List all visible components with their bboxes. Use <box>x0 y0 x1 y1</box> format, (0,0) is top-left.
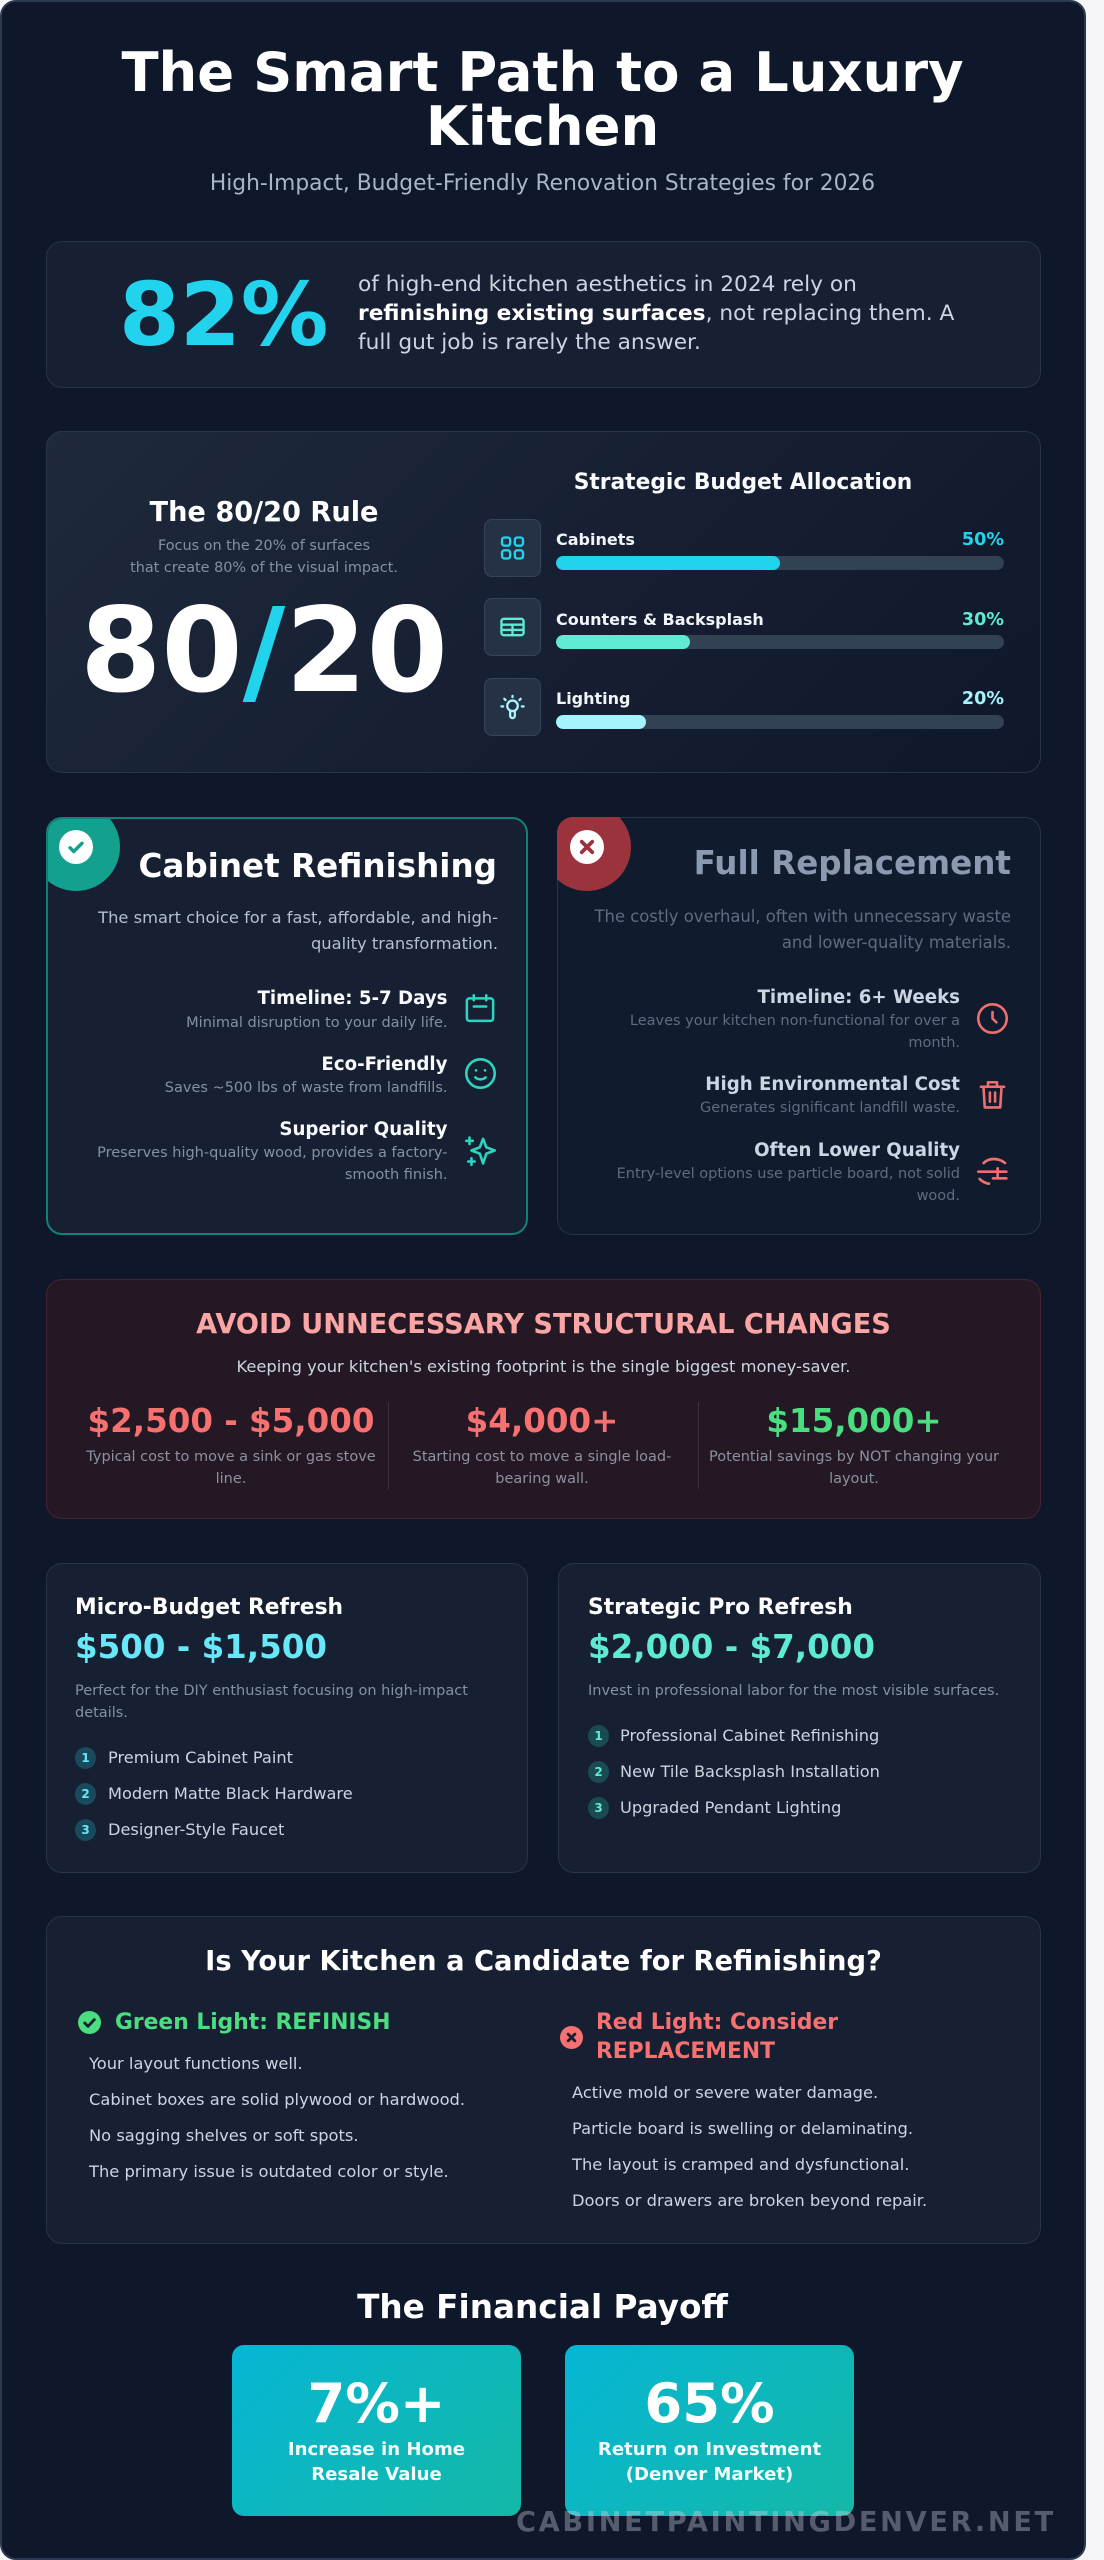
badge: cross <box>543 803 631 891</box>
label: counters: Counters & Backsplash <box>556 610 764 629</box>
stat: sink move: line. <box>216 1471 246 1487</box>
heading: AVOID UNNECESSARY STRUCTURAL CHANGES <box>196 1309 891 1340</box>
heading: Cabinet Refinishing <box>138 847 497 885</box>
feature: timeline: Timeline: 6+ Weeks <box>757 987 960 1008</box>
icon: counters <box>484 598 541 656</box>
description <box>594 907 1011 952</box>
title <box>121 41 964 158</box>
description: quality transformation. <box>311 934 498 953</box>
feature: quality: Preserves high-quality wood, provides a factory- <box>97 1144 448 1160</box>
feature: timeline: month. <box>908 1035 960 1051</box>
description: Perfect for the DIY enthusiast focusing on high-impact <box>75 1682 468 1698</box>
description: and lower-quality materials. <box>782 933 1011 952</box>
bar: lighting <box>556 715 1004 729</box>
stat: sink move: Typical cost to move a sink or gas stove <box>86 1449 376 1465</box>
value: 30%: 30% <box>962 610 1004 630</box>
feature: environmental cost <box>700 1074 960 1116</box>
label: cabinets: Cabinets <box>556 530 635 549</box>
icon: smile <box>465 1058 496 1089</box>
stat description: of high-end kitchen aesthetics in 2024 rely on <box>358 272 857 297</box>
panel: 82% statistic <box>46 241 1041 388</box>
stat description: refinishing existing surfaces, not replacing them. A <box>358 301 954 326</box>
stat: savings <box>709 1402 999 1487</box>
big stat: 82% <box>119 264 328 366</box>
list item 3: Designer-Style Faucet <box>108 1820 284 1838</box>
label <box>598 2439 821 2485</box>
list: green light <box>88 2054 465 2181</box>
panel: full replacement <box>557 817 1041 1235</box>
stat: savings: $15,000+ <box>766 1402 942 1440</box>
title: The Smart Path to a Luxury <box>121 41 964 104</box>
feature: timeline: Minimal disruption to your daily life. <box>186 1014 448 1030</box>
icon: cabinets <box>484 519 541 577</box>
heading: Micro-Budget Refresh <box>75 1595 343 1620</box>
list: red light: Particle board is swelling or delaminating. <box>572 2118 913 2138</box>
feature: eco-friendly: Eco-Friendly <box>321 1054 448 1074</box>
icon: damaged material <box>977 1158 1008 1185</box>
stat: sink move: $2,500 - $5,000 <box>88 1402 374 1440</box>
panel: candidate checklist <box>46 1916 1041 2244</box>
card: resale value <box>232 2344 521 2516</box>
list item 3: 3 <box>81 1822 90 1836</box>
rule description: that create 80% of the visual impact. <box>130 560 398 576</box>
stat description <box>358 272 954 355</box>
subheading: Keeping your kitchen's existing footprint is the single biggest money-saver. <box>237 1357 850 1376</box>
description <box>98 908 498 953</box>
feature: environmental cost: High Environmental Cost <box>705 1074 960 1094</box>
heading: Full Replacement <box>694 844 1011 882</box>
value: 50%: 50% <box>962 530 1004 550</box>
big 80/20 figure: 80/20 <box>80 583 448 719</box>
feature: lower quality <box>617 1140 960 1204</box>
panel: cabinet refinishing <box>46 817 528 1235</box>
list item 2: New Tile Backsplash Installation <box>620 1762 880 1780</box>
list: red light: Active mold or severe water damage. <box>572 2082 878 2102</box>
price: $2,000 - $7,000 <box>588 1628 875 1666</box>
description: The costly overhaul, often with unnecessary waste <box>595 907 1011 926</box>
value: 20%: 20% <box>962 689 1004 709</box>
label: (Denver Market) <box>626 2464 793 2485</box>
heading: 80/20 rule: The 80/20 Rule <box>150 496 378 528</box>
feature: eco-friendly: Saves ~500 lbs of waste from landfills. <box>165 1080 448 1096</box>
list: red light: The layout is cramped and dysfunctional. <box>572 2154 909 2174</box>
list: green light: The primary issue is outdated color or style. <box>89 2162 449 2181</box>
figure: 65% <box>644 2372 775 2434</box>
icon: red cross <box>560 2026 583 2049</box>
panel: micro-budget refresh <box>46 1562 528 1872</box>
description: Invest in professional labor for the most visible surfaces. <box>588 1682 999 1698</box>
list: green light: No sagging shelves or soft spots. <box>89 2126 359 2145</box>
list: green light: Your layout functions well. <box>89 2054 303 2072</box>
feature: quality: Superior Quality <box>279 1118 448 1140</box>
icon: sparkles <box>465 1136 496 1166</box>
feature: quality <box>97 1118 448 1182</box>
heading: Strategic Pro Refresh <box>588 1595 853 1620</box>
feature: timeline <box>630 987 960 1051</box>
feature: timeline <box>186 988 448 1030</box>
panel: 80/20 rule and budget allocation <box>46 431 1041 773</box>
feature: lower quality: wood. <box>917 1188 960 1204</box>
description <box>75 1682 468 1720</box>
bar: counters <box>556 635 1004 649</box>
card: return on investment <box>565 2344 854 2516</box>
title: Kitchen <box>426 95 659 158</box>
feature: timeline: Leaves your kitchen non-functional for over a <box>630 1013 960 1029</box>
stat: wall move: $4,000+ <box>466 1402 618 1440</box>
stat: savings: layout. <box>829 1471 879 1487</box>
heading: red light: Red Light: Consider <box>596 2010 838 2035</box>
feature: timeline: Timeline: 5-7 Days <box>258 988 448 1008</box>
description: The smart choice for a fast, affordable, and high- <box>98 908 498 927</box>
watermark: CABINETPAINTINGDENVER.NET <box>516 2507 1056 2538</box>
list item 3: 3 <box>594 1800 603 1814</box>
list item 2: 2 <box>81 1786 90 1800</box>
stat: savings: Potential savings by NOT changing your <box>709 1449 999 1465</box>
list: red light <box>572 2082 927 2210</box>
feature: quality: smooth finish. <box>345 1166 448 1182</box>
list item 1: 1 <box>594 1728 603 1742</box>
stat: wall move: bearing wall. <box>495 1471 589 1487</box>
stat: wall move: Starting cost to move a single load- <box>413 1449 671 1465</box>
stat: wall move <box>413 1402 671 1487</box>
panel: strategic pro refresh <box>558 1562 1041 1872</box>
rule description <box>130 538 398 576</box>
stat description: full gut job is rarely the answer. <box>358 330 701 355</box>
label: Return on Investment <box>598 2439 821 2460</box>
label <box>288 2439 465 2485</box>
badge: check <box>32 803 120 891</box>
feature: lower quality: Often Lower Quality <box>754 1140 960 1160</box>
panel: avoid structural changes <box>46 1278 1041 1518</box>
list: green light: Cabinet boxes are solid plywood or hardwood. <box>89 2090 465 2108</box>
price: $500 - $1,500 <box>75 1628 327 1666</box>
label: lighting: Lighting <box>556 689 630 708</box>
list item 1: 1 <box>81 1750 90 1764</box>
list item 1: Premium Cabinet Paint <box>108 1748 293 1766</box>
label: Resale Value <box>311 2464 442 2485</box>
heading: green light: Green Light: REFINISH <box>115 2010 390 2035</box>
list: red light: Doors or drawers are broken beyond repair. <box>572 2190 927 2210</box>
icon: green check <box>78 2011 101 2034</box>
subtitle: High-Impact, Budget-Friendly Renovation Strategies for 2026 <box>210 170 875 196</box>
feature: lower quality: Entry-level options use particle board, not solid <box>617 1166 960 1182</box>
rule description: Focus on the 20% of surfaces <box>158 538 370 554</box>
description: details. <box>75 1704 128 1720</box>
heading: red light: REPLACEMENT <box>596 2039 775 2064</box>
stat: sink move <box>86 1402 376 1487</box>
list item 2: Modern Matte Black Hardware <box>108 1784 353 1802</box>
icon: lighting <box>484 678 541 736</box>
figure: 7%+ <box>308 2372 445 2434</box>
icon: trash <box>980 1081 1006 1109</box>
icon: calendar <box>466 994 494 1022</box>
label: Increase in Home <box>288 2439 465 2460</box>
list item 1: Professional Cabinet Refinishing <box>620 1726 879 1744</box>
list item 2: 2 <box>594 1764 603 1778</box>
heading: red light <box>596 2010 838 2064</box>
feature: eco-friendly <box>165 1054 448 1096</box>
feature: environmental cost: Generates significant landfill waste. <box>700 1100 960 1116</box>
heading: budget allocation: Strategic Budget Allocation <box>574 470 912 495</box>
bar: cabinets <box>556 556 1004 570</box>
heading: financial payoff: The Financial Payoff <box>357 2288 728 2326</box>
list item 3: Upgraded Pendant Lighting <box>620 1798 841 1816</box>
heading: Is Your Kitchen a Candidate for Refinishing? <box>205 1946 882 1976</box>
icon: clock <box>977 1003 1008 1034</box>
